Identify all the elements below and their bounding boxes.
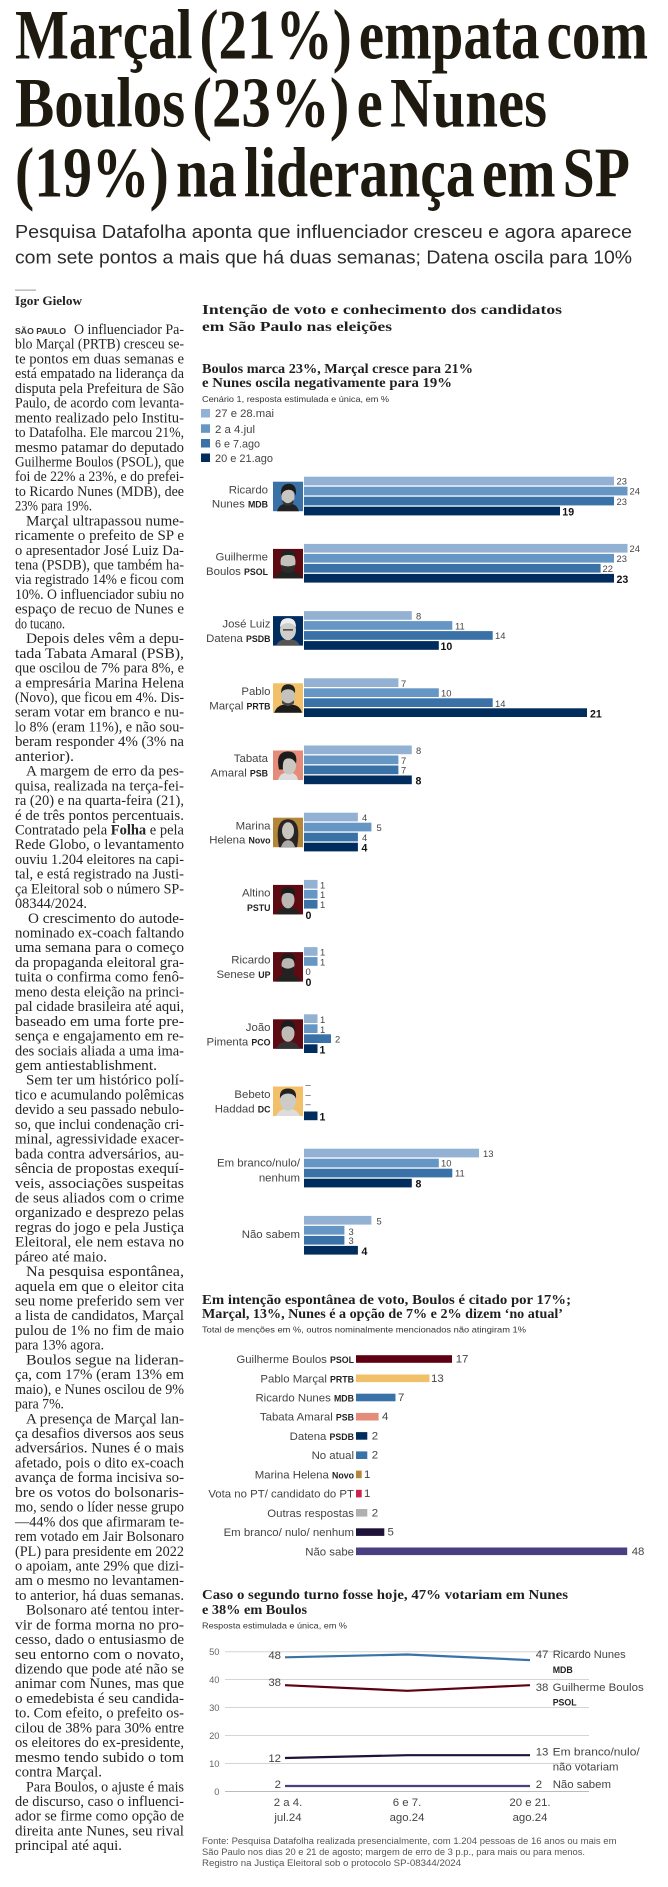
article text column: uma semana para o começo [15,940,184,956]
article text column: meno desta eleição na princi- [15,984,184,1000]
right value labels: Guilherme Boulos [553,1682,644,1694]
article text column: está empatado na liderança da [15,366,185,382]
article text column: 23% para 19%. [15,499,92,515]
article text column: O crescimento do autode- [28,911,184,927]
x axis labels: jul.24 [273,1812,302,1824]
candidate: Pablo Marçal: 14 [495,698,505,709]
article text column: nominado ex-coach faltando [15,926,184,942]
y axis labels [209,1646,220,1797]
chart heading: spontaneous vote: Em intenção espontânea de voto, Boulos é citado por 17%; [202,1292,571,1307]
left value labels [268,1650,281,1791]
article text column: tuita o confirma como fenô- [15,970,184,986]
candidate: José Luiz Datena: 10 [440,641,452,653]
article text column: to. Com efeito, o prefeito os- [15,1706,184,1722]
article text column: Na pesquisa espontânea, [26,1264,184,1280]
article text column: A presença de Marçal lan- [26,1411,184,1427]
candidate: José Luiz Datena: 11 [455,621,465,632]
article text column: Paulo, de acordo com levanta- [15,396,184,412]
candidate: Tabata Amaral: Amaral PSB [211,768,268,780]
candidate: Pablo Marçal [209,678,602,720]
article text column: disputa pela Prefeitura de São [15,381,184,397]
candidate: João Pimenta: Pimenta PCO [206,1036,271,1048]
article text column: to Ricardo Nunes (MDB), dee [15,484,184,500]
article text column: veis, associações suspeitas [15,1176,184,1192]
title: Boulos (23%) e Nunes [15,65,547,143]
article text column: sência de propostas exequí- [15,1161,184,1177]
article text column: Marçal ultrapassou nume- [26,513,184,529]
article text column: cilou de 38% para 30% entre [15,1720,184,1736]
candidate: José Luiz Datena: Datena PSDB [206,633,270,645]
candidate: Guilherme Boulos: 23 [616,553,627,564]
article text column: bada contra adversários, au- [15,1146,184,1162]
category: Em branco/nulo/nenhum: 13 [483,1148,493,1159]
candidate: Marina Helena: Marina [236,820,271,832]
graphic section heading: em São Paulo nas eleições [202,319,392,334]
y axis labels: 30 [209,1702,220,1713]
bar chart: spontaneous vote: 17 [456,1354,468,1366]
article text column: mesmo patamar do deputado [15,440,184,456]
x axis labels: 20 e 21. [509,1797,551,1809]
bar chart: spontaneous vote: Outras respostas [267,1508,354,1520]
line chart: runoff [209,1646,644,1824]
article text column: ouviu 1.204 eleitores na capi- [15,852,184,868]
y axis labels: 50 [209,1646,220,1657]
article text column: tico e acumulando polêmicas [15,1087,184,1103]
category: Não sabem: Não sabem [242,1229,300,1241]
candidate: Tabata Amaral: 8 [416,745,421,756]
candidate: Ricardo Senese: 1 [320,957,325,968]
candidate: Altino: Altino [242,888,270,900]
article text column: do tucano. [15,616,65,632]
article text column: ra (20) e na quarta-feira (21), [15,793,184,809]
chart heading: runoff: Resposta estimulada e única, em % [202,1621,348,1631]
candidate: Bebeto Haddad: 1 [320,1112,326,1124]
candidate: Marina Helena: 4 [362,832,367,843]
bar chart: spontaneous vote: Ricardo Nunes MDB [255,1392,354,1404]
chart heading: first round: Cenário 1, resposta estimulada e única, em % [202,394,390,404]
graphic section heading [202,302,562,334]
bar chart: spontaneous vote: Pablo Marçal PRTB [260,1373,354,1385]
article text column: direita ante Nunes, seu rival [15,1823,184,1839]
article text column: ça Eleitoral sob o número SP- [15,881,184,897]
category: Não sabem: 5 [376,1215,382,1226]
article text column: para 13% agora. [15,1338,104,1354]
article text column: ricamente o prefeito de SP e [15,528,184,544]
chart heading: first round: Boulos marca 23%, Marçal cresce para 21% [202,361,473,376]
category: Não sabem [242,1215,382,1258]
article text column: Guilherme Boulos (PSOL), que [15,454,184,470]
article text column: a lista de candidatos, Marçal [15,1308,184,1324]
bar chart: spontaneous vote: 5 [388,1527,394,1539]
article text column: ça, com 17% (eram 13% em [15,1367,184,1383]
category: Não sabem: 3 [348,1226,354,1237]
article text column: ador se firme como opção de [15,1809,184,1825]
bar chart: spontaneous vote: 2 [372,1430,378,1442]
article text column: animar com Nunes, mas que [15,1676,184,1692]
article text column: o apoiam, ante 29% que dizi- [15,1558,184,1574]
candidate: João Pimenta: 1 [320,1024,325,1035]
legend [201,408,274,465]
article text column: bre os votos do bolsonaris- [15,1485,184,1501]
subtitle [15,221,632,268]
x axis labels [273,1797,551,1824]
right value labels: PSOL [553,1698,577,1708]
candidate: João Pimenta [206,1014,340,1056]
article text column: to anterior, há duas semanas. [15,1588,184,1604]
x axis labels: 2 a 4. [274,1797,302,1809]
article text column: o emedebista é seu candida- [15,1691,184,1707]
candidate: José Luiz Datena: 14 [495,630,505,641]
legend: 27 e 28.mai [215,408,274,420]
candidate: Marina Helena: 4 [362,843,368,855]
candidate: Ricardo Senese: 0 [306,966,311,977]
candidate: Tabata Amaral: 8 [416,776,422,788]
bar chart: spontaneous vote: Datena PSDB [290,1431,354,1443]
article text column: para 7%. [15,1397,64,1413]
candidate: Bebeto Haddad: – [306,1088,312,1100]
bar chart: spontaneous vote: 48 [632,1546,644,1558]
candidate: José Luiz Datena: 8 [416,611,421,622]
right value labels: MDB [553,1665,573,1675]
y axis labels: 0 [214,1786,220,1797]
article text column: lo 8% (eram 11%), e não sou- [15,719,184,735]
y axis labels: 20 [209,1730,220,1741]
article text column: tena (PSDB), que também ha- [15,558,184,574]
article text column: O influenciador Pa- [74,322,184,338]
candidate: Guilherme Boulos [206,543,640,586]
title [15,0,648,213]
bar chart: spontaneous vote: Vota no PT/ candidato do PT [208,1489,354,1501]
candidate: Bebeto Haddad: – [306,1098,312,1109]
article text column: é de três pontos percentuais. [15,808,184,824]
article text column: Sem ter um histórico polí- [26,1073,184,1089]
bar chart: spontaneous vote: Marina Helena Novo [255,1469,355,1481]
article text column: pal cidade brasileira até aqui, [15,999,184,1015]
article text column: to Datafolha. Ele marcou 21%, [15,425,184,441]
article text column: mento realizado pelo Institu- [15,410,184,426]
left value labels: 48 [268,1650,281,1662]
candidate: Marina Helena: 5 [376,822,382,833]
series: Ricardo Nunes [285,1654,530,1660]
y axis labels: 40 [209,1674,220,1685]
right value labels: 2 [536,1779,542,1791]
article text column: afetado, pois o dito ex-coach [15,1455,184,1471]
source note [202,1836,617,1868]
candidate: João Pimenta: 1 [320,1044,326,1056]
candidate: Altino: 0 [306,910,312,922]
article text column: des sociais aliada a uma ima- [15,1043,184,1059]
graphic section heading: Intenção de voto e conhecimento dos candidatos [202,302,562,317]
bar chart: spontaneous vote: 1 [364,1488,370,1500]
candidate: Marina Helena [209,812,382,855]
article text column: tal, e está registrado na Justi- [15,867,184,883]
article text column: pulou de 1% no fim de maio [15,1323,184,1339]
article text column: avança de forma incisiva so- [15,1470,184,1486]
left value labels: 38 [268,1677,281,1689]
right value labels: não votariam [553,1762,619,1774]
article text column: principal até aqui. [15,1838,122,1854]
bar chart: spontaneous vote: 2 [372,1450,378,1462]
candidate: Bebeto Haddad: – [306,1078,312,1090]
candidate: João Pimenta: 1 [320,1014,325,1025]
left value labels: 2 [275,1779,281,1791]
x axis labels: 6 e 7. [393,1797,421,1809]
candidate: Guilherme Boulos: 22 [602,563,613,574]
candidate: Ricardo Nunes: 19 [562,507,574,519]
article text column: beram responder 4% (3% na [15,734,185,750]
candidate: Guilherme Boulos: 23 [616,574,628,586]
candidate: João Pimenta: João [246,1022,270,1034]
candidate: Guilherme Boulos: Guilherme [215,552,268,564]
candidate: Marina Helena: Helena Novo [209,835,271,847]
chart heading: runoff: e 38% em Boulos [202,1602,307,1617]
article text column [14,322,185,1854]
chart heading: first round [202,361,473,404]
article text column: tada Tabata Amaral (PSB), [15,646,184,662]
article text column: 08344/2024. [15,896,87,912]
article text column: seu entorno com o novato, [15,1647,184,1663]
candidate: Tabata Amaral: 7 [401,755,406,766]
candidate: Pablo Marçal: 21 [590,708,602,720]
chart heading: runoff [202,1587,568,1631]
category: Em branco/nulo/nenhum: 8 [416,1179,422,1191]
article text column: que oscilou de 7% para 8%, e [15,661,184,677]
right value labels: 13 [536,1747,548,1759]
right value labels: 47 [536,1649,548,1661]
article text column: os eleitores do ex-presidente, [15,1735,184,1751]
article text column: espaço de recuo de Nunes e [15,602,184,618]
legend: 20 e 21.ago [215,453,273,465]
candidate: José Luiz Datena: José Luiz [222,619,271,631]
candidate: Bebeto Haddad: Bebeto [234,1089,270,1101]
x axis labels: ago.24 [390,1812,424,1824]
category: Não sabem: 4 [362,1246,368,1258]
subtitle: com sete pontos a mais que há duas semanas; Datena oscila para 10% [15,246,632,268]
right value labels [536,1649,644,1791]
legend: 2 a 4.jul [215,424,255,436]
article text column: de discurso, caso o influenci- [15,1794,184,1810]
right value labels: Não sabem [553,1779,611,1791]
category: Não sabem: 3 [348,1235,354,1246]
chart heading: first round: e Nunes oscila negativamente para 19% [202,375,452,390]
article text column: sença e engajamento em re- [15,1029,184,1045]
article text column: SÃO PAULO [15,326,66,336]
source note: São Paulo nos dias 20 e 21 de agosto; margem de erro de 3 p.p., para mais ou para menos. [202,1847,585,1857]
chart heading: runoff: Caso o segundo turno fosse hoje, 47% votariam em Nunes [202,1587,568,1602]
bar chart: spontaneous vote: 13 [431,1373,444,1385]
series: Não sabem [285,1785,530,1787]
article text column: regras do jogo e pela Justiça [15,1220,185,1236]
candidate: Ricardo Nunes: 24 [630,486,640,497]
candidate: Ricardo Senese: 1 [320,947,325,958]
candidate: Tabata Amaral: 7 [401,764,406,776]
candidate: Ricardo Senese: Senese UP [216,969,271,981]
source note: Fonte: Pesquisa Datafolha realizada presencialmente, com 1.204 pessoas de 16 anos ou mais em [202,1836,617,1846]
article text column: via registrado 14% e ficou com [15,572,184,588]
candidate: Bebeto Haddad: Haddad DC [215,1104,271,1116]
candidate: Ricardo Senese [216,947,325,989]
candidate: João Pimenta: 2 [335,1033,340,1044]
candidate: Tabata Amaral [211,745,422,788]
candidate: Guilherme Boulos: 24 [630,543,640,554]
x axis labels: ago.24 [513,1812,547,1824]
article text column: seram votar em branco e nu- [15,705,184,721]
category: Em branco/nulo/nenhum: Em branco/nulo/ [217,1158,301,1170]
article text column: te pontos em duas semanas e [15,351,184,367]
article text column: organizado e desprezo pelas [15,1205,184,1221]
bar chart: spontaneous vote: Tabata Amaral PSB [260,1412,354,1424]
candidate: Altino: 1 [320,899,325,910]
candidate: Ricardo Nunes: Ricardo [229,484,268,496]
article text column: da propaganda eleitoral gra- [15,955,184,971]
bar chart: spontaneous vote: 4 [382,1411,388,1423]
candidate: Altino: PSTU [247,903,270,913]
candidate: Ricardo Nunes: 23 [616,496,627,507]
article text column: minal, agressividade exacer- [15,1132,184,1148]
legend: 6 e 7.ago [215,438,260,450]
article text column: (PL) para presidente em 2022 [15,1544,184,1560]
article text column: Boulos segue na lideran- [26,1352,184,1368]
candidate: Pablo Marçal: Marçal PRTB [209,700,270,712]
candidate: Ricardo Nunes: 23 [616,476,627,487]
article text column: anterior). [15,749,74,765]
source note: Registro na Justiça Eleitoral sob o protocolo SP-08344/2024 [202,1858,461,1868]
subtitle: Pesquisa Datafolha aponta que influenciador cresceu e agora aparece [15,221,632,242]
right value labels: Ricardo Nunes [553,1649,626,1661]
article text column: Rede Globo, o levantamento [15,837,184,853]
article text column: seu nome preferido sem ver [15,1294,184,1310]
bar chart: spontaneous vote: Não sabe [305,1546,354,1558]
right value labels: Em branco/nulo/ [553,1747,641,1759]
left value labels: 12 [268,1753,281,1765]
chart heading: spontaneous vote: Total de menções em %, outros nominalmente mencionados não atingiram 1% [202,1325,527,1335]
candidate: Guilherme Boulos: Boulos PSOL [206,566,269,578]
article text column: adversários. Nunes é o mais [15,1441,184,1457]
article text column: blo Marçal (PRTB) cresceu se- [15,337,184,353]
article text column: A margem de erro da pes- [26,764,184,780]
series: Em branco/nulo [285,1755,530,1758]
candidate: Altino [242,879,325,922]
article text column: foi de 22% a 23%, e do prefei- [15,469,184,485]
article text column: cesso, dado o entusiasmo de [15,1632,184,1648]
candidate: Ricardo Senese: Ricardo [231,955,270,967]
article text column: mo, sendo o líder nesse grupo [15,1500,184,1516]
article text column: aquela em que o eleitor cita [15,1279,185,1295]
article text column: de seus aliados com o crime [15,1190,184,1206]
article text column: devido a seu passado nebulo- [15,1102,184,1118]
right value labels: 38 [536,1682,548,1694]
candidate: Pablo Marçal: 7 [401,678,406,689]
candidate: Ricardo Senese: 0 [306,977,312,989]
article text column: vir de forma morna no pro- [15,1617,184,1633]
candidate: Altino: 1 [320,889,325,900]
article text column: Para Boulos, o ajuste é mais [26,1779,184,1795]
candidate: Bebeto Haddad [215,1078,326,1124]
category: Em branco/nulo/nenhum: nenhum [259,1173,300,1185]
article text column: contra Marçal. [15,1765,102,1781]
article text column: Bolsonaro até tentou inter- [26,1603,184,1619]
byline: Igor Gielow [15,294,82,308]
article text column: 10%. O influenciador subiu no [15,587,184,603]
chart heading: spontaneous vote: Marçal, 13%, Nunes é a opção de 7% e 2% dizem ‘no atual’ [202,1306,563,1321]
bar chart: spontaneous vote: 7 [398,1392,404,1404]
article text column: Depois deles vêm a depu- [26,631,184,647]
article text column: so, que inclui condenação cri- [15,1117,184,1133]
series: Guilherme Boulos [285,1685,530,1691]
candidate: Marina Helena: 4 [362,812,367,823]
candidate: Altino: 1 [320,879,325,890]
bar chart: spontaneous vote: No atual [312,1450,354,1462]
category: Em branco/nulo/nenhum: 11 [455,1168,465,1179]
article text column: maio), e Nunes oscilou de 9% [15,1382,184,1398]
article text column: gem antiestablishment. [15,1058,157,1074]
candidate: Ricardo Nunes [212,476,640,519]
article text column: a empresária Marina Helena [15,675,185,691]
article text column: baseado em uma forte pre- [15,1014,184,1030]
bar chart: spontaneous vote: 1 [364,1469,370,1481]
candidate: Ricardo Nunes: Nunes MDB [212,499,268,511]
category: Em branco/nulo/nenhum [217,1148,493,1191]
candidate: Pablo Marçal: 10 [441,687,451,698]
chart heading: spontaneous vote [202,1292,571,1335]
article text column: mesmo tendo subido o tom [15,1750,184,1766]
article text column: o apresentador José Luiz Da- [15,543,184,559]
article text column: am o mesmo no levantamen- [15,1573,184,1589]
article text column: dizendo que pode até não se [15,1662,184,1678]
category: Em branco/nulo/nenhum: 10 [441,1158,451,1169]
bar chart: spontaneous vote: 2 [372,1507,378,1519]
bar chart: spontaneous vote [208,1354,644,1558]
article text column: Eleitoral, ele nem estava no [15,1235,184,1251]
bar chart: voting intention by candidate [206,476,640,1258]
article text column: —44% dos que afirmaram te- [14,1514,184,1530]
y axis labels: 10 [209,1758,220,1769]
article text column: rem votado em Jair Bolsonaro [15,1529,184,1545]
candidate: José Luiz Datena [206,611,505,653]
bar chart: spontaneous vote: Em branco/ nulo/ nenhum [224,1527,354,1539]
candidate: Tabata Amaral: Tabata [234,753,269,765]
article text column: Contratado pela Folha e pela [15,822,185,838]
bar chart: spontaneous vote: Guilherme Boulos PSOL [236,1354,355,1366]
article text column: páreo até maio. [15,1249,107,1265]
article text column: quisa, realizada na terça-fei- [15,778,184,794]
article text column: ça desafios diversos aos seus [15,1426,184,1442]
article text column: (Novo), que ficou em 4%. Dis- [15,690,184,706]
candidate: Pablo Marçal: Pablo [241,686,270,698]
